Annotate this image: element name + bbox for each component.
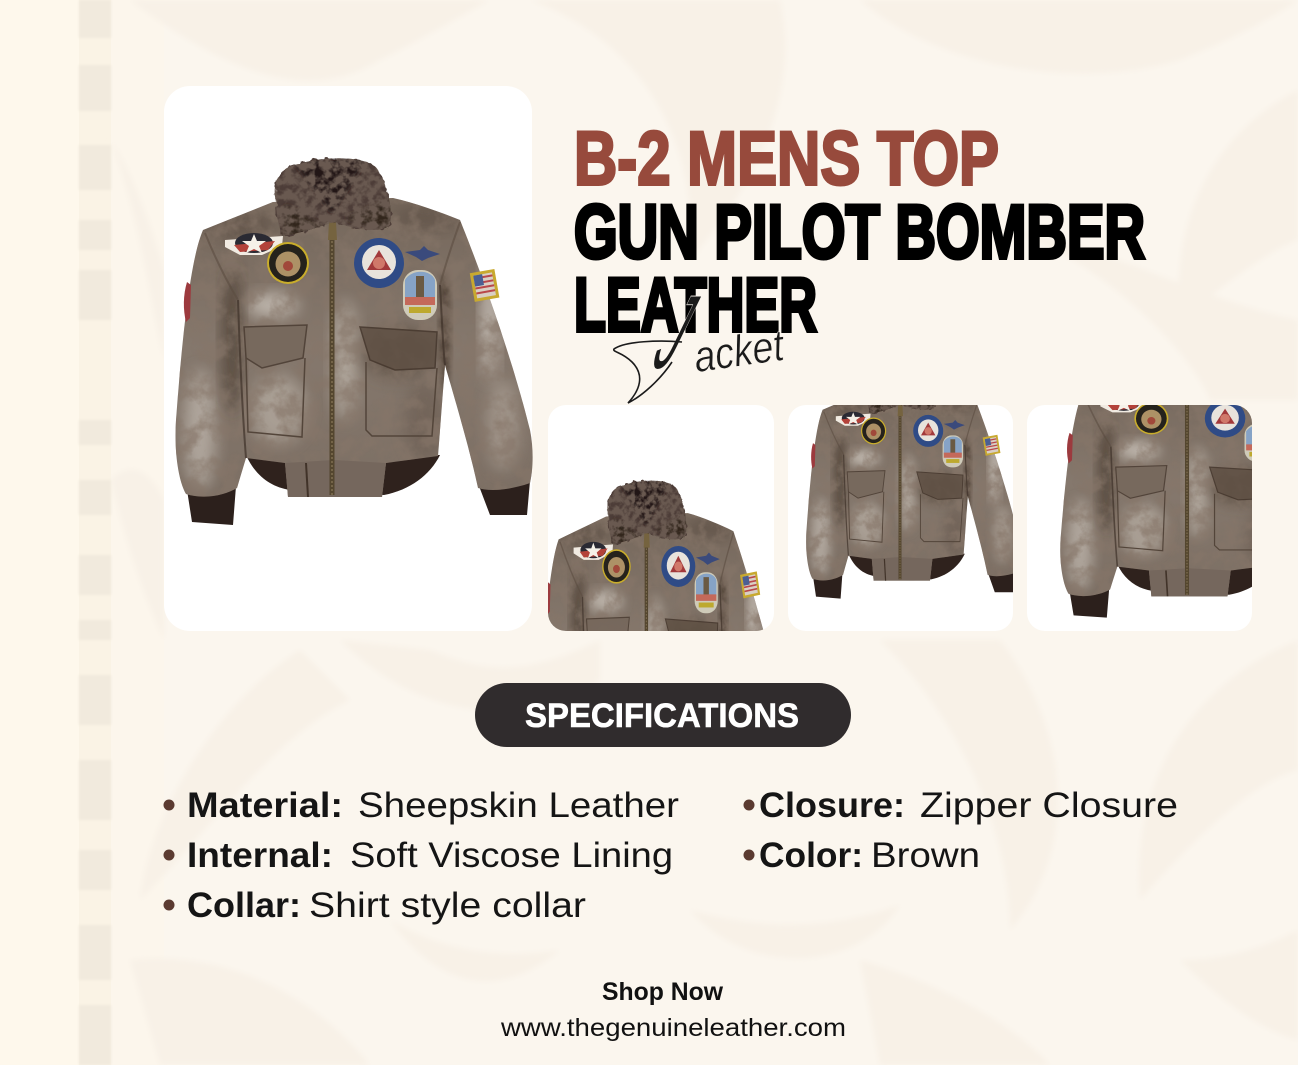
specifications heading pill: SPECIFICATIONS <box>525 697 799 735</box>
spec: collar <box>164 886 586 925</box>
script word: Jacket <box>614 275 788 403</box>
photo: pockets and hem <box>1060 405 1252 618</box>
script word: Jacket: J <box>640 275 710 391</box>
spec: collar: Shirt style collar <box>309 886 586 925</box>
specifications heading pill <box>475 683 851 747</box>
photo: jacket body <box>806 405 1013 599</box>
spec: internal <box>164 836 673 875</box>
script word: Jacket: acket <box>691 321 788 382</box>
specifications list: right column <box>744 786 1178 875</box>
spec: color <box>744 836 980 875</box>
spec: closure: Zipper Closure <box>920 786 1178 825</box>
spec: collar: Collar: <box>187 886 301 925</box>
photo: bomber jacket front view <box>170 155 540 525</box>
spec: internal: Soft Viscose Lining <box>350 836 673 875</box>
spec: closure: Closure: <box>759 786 905 825</box>
spec: closure <box>744 786 1178 825</box>
shop now label: Shop Now <box>602 978 724 1006</box>
spec: color: Color: <box>759 836 863 875</box>
website address: www.thegenuineleather.com <box>500 1014 846 1042</box>
photo: collar and chest <box>548 480 764 631</box>
spec: material <box>164 786 679 825</box>
spec: material: Sheepskin Leather <box>358 786 679 825</box>
spec: internal: Internal: <box>187 836 333 875</box>
panel: thumbnail pocket close-up <box>1027 405 1252 631</box>
panel: main jacket photo <box>164 86 540 631</box>
spec: material: Material: <box>187 786 343 825</box>
call to action <box>500 978 846 1042</box>
spec: color: Brown <box>871 836 980 875</box>
panel: thumbnail collar close-up <box>548 405 774 631</box>
title line 1: B-2 MENS TOP <box>574 116 999 202</box>
panel: thumbnail jacket body <box>788 405 1013 631</box>
title <box>574 116 1145 348</box>
specifications list: left column <box>164 786 679 925</box>
title line 3: LEATHER <box>574 263 817 348</box>
